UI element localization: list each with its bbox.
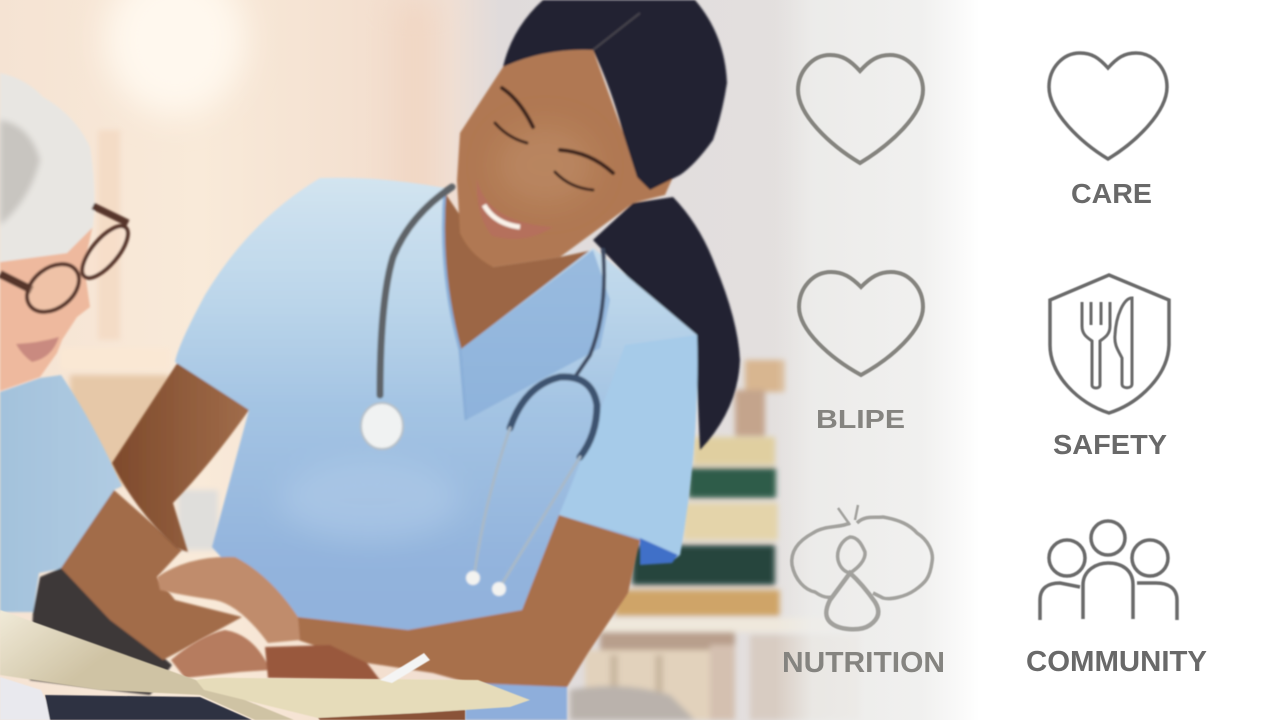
panel: right icon column (1040, 53, 1177, 620)
sleeve right (559, 335, 697, 563)
patient trousers (30, 568, 172, 695)
nurse teeth (484, 205, 520, 227)
shirt under book (0, 677, 55, 720)
patient mouth (16, 337, 59, 362)
stethoscope ear tips (466, 571, 506, 596)
nurse bare arm (112, 362, 249, 552)
icon: heart (798, 55, 923, 163)
nurse scrubs (175, 178, 697, 630)
left page (0, 610, 294, 720)
label: CARE: CARE (1071, 178, 1152, 209)
patient shirt (0, 375, 122, 612)
right page (196, 678, 530, 718)
nurse forearm (298, 515, 640, 687)
label: SAFETY: SAFETY (1053, 429, 1167, 460)
patient hair (0, 73, 94, 262)
pen (380, 653, 430, 683)
open book (0, 610, 530, 720)
knife (1115, 298, 1132, 388)
nurse hair (503, 0, 727, 190)
elderly patient (0, 73, 242, 695)
label: NUTRITION: NUTRITION (782, 647, 945, 679)
label: COMMUNITY: COMMUNITY (1026, 646, 1207, 678)
hair parting (593, 13, 640, 50)
stethoscope chest piece (361, 403, 403, 449)
scrub highlight (280, 460, 460, 540)
nurse ponytail (593, 197, 740, 450)
nurse (112, 0, 740, 720)
icon: heart second (799, 272, 923, 375)
nurse neck (443, 190, 593, 350)
patient face (0, 225, 93, 391)
skin below page (318, 710, 465, 720)
nurse cheek shading (495, 125, 595, 205)
nurse mouth (477, 178, 553, 239)
nurse collar fold (460, 250, 610, 420)
label: BLIPE: BLIPE (816, 404, 905, 434)
photo: blurred room background (0, 0, 1000, 720)
panel: left icon column (792, 55, 932, 629)
stethoscope tube (380, 187, 604, 587)
icon: community (1040, 521, 1177, 620)
icon: heart care (1049, 53, 1167, 159)
icon: shield with fork and knife (1050, 275, 1169, 413)
nurse hands (157, 557, 300, 643)
book cover (45, 695, 252, 720)
patient glasses (0, 206, 136, 322)
white fade overlay (775, 0, 980, 720)
nurse eyes and brows (495, 88, 613, 190)
nurse face (457, 50, 673, 267)
fork (1082, 302, 1110, 388)
sleeve hem (640, 538, 678, 565)
icon: nutrition (792, 505, 932, 629)
patient forearm (61, 490, 242, 660)
